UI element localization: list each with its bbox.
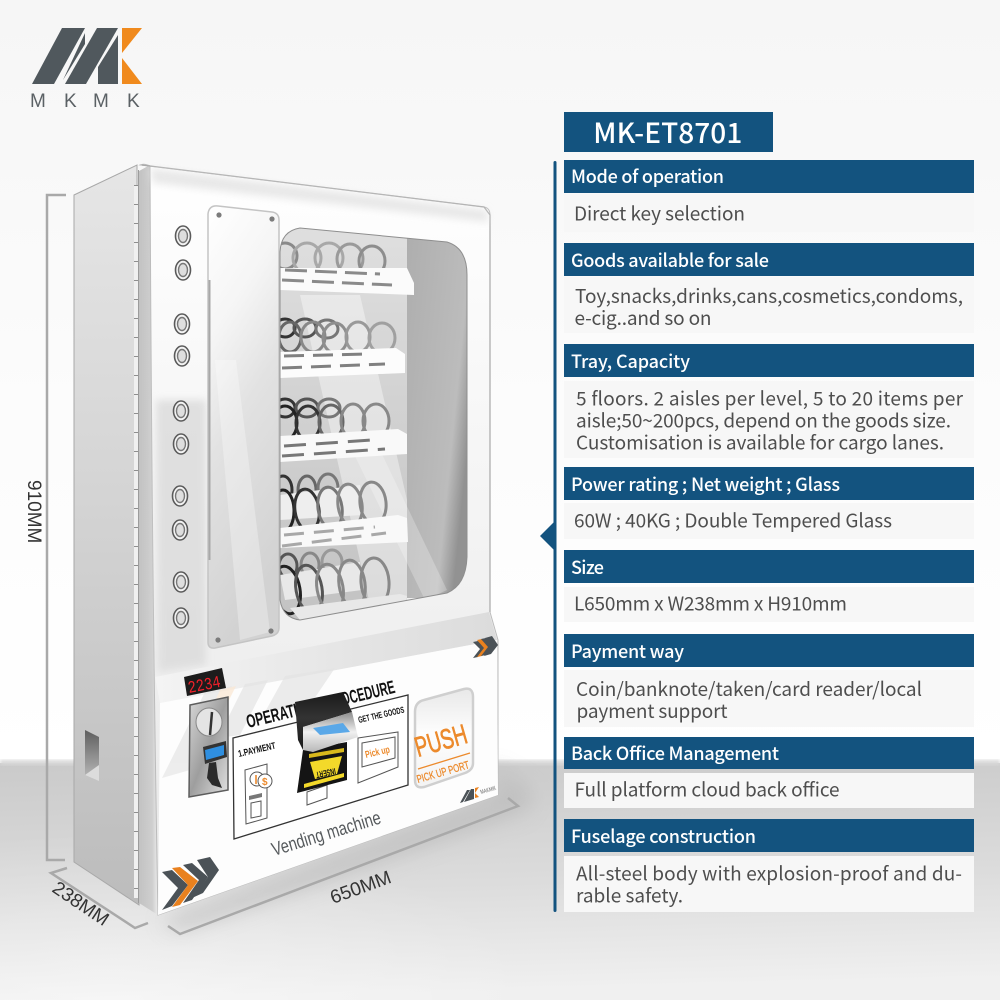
spec: power weight glass <box>564 467 974 539</box>
spec panel timeline rail <box>540 161 556 912</box>
machine side panel <box>74 165 139 905</box>
window outline <box>280 228 467 620</box>
bill validator: INSERT <box>315 766 337 780</box>
machine front <box>140 164 498 915</box>
spec: fuselage construction: All-steel body with explosion-proof and du- <box>576 860 962 886</box>
spec: fuselage construction <box>564 819 974 912</box>
dimension: width 238MM <box>48 868 148 931</box>
keypad buttons <box>172 226 190 628</box>
step 1 coin slot icon: $ <box>262 777 268 788</box>
floor glow <box>0 790 540 1000</box>
brand logo <box>30 28 142 112</box>
brand logo: K <box>64 91 77 112</box>
push pick-up port: PICK UP PORT <box>416 759 471 786</box>
spec: fuselage construction: rable safety. <box>576 882 683 908</box>
large chevrons bottom left <box>162 857 219 910</box>
spec: back office <box>564 737 974 808</box>
model title: MK-ET8701 <box>593 112 742 152</box>
spec: fuselage construction: Fuselage construction <box>571 823 756 849</box>
glass window and trays <box>270 225 467 625</box>
board title start: OPERATION <box>244 695 317 732</box>
spec: payment way: payment support <box>576 697 728 724</box>
background wall <box>0 0 1000 765</box>
brand logo: M <box>30 91 46 112</box>
spec: tray capacity: aisle;50~200pcs, depend on the goods size. <box>576 406 951 434</box>
lower fascia bevel <box>155 612 497 703</box>
red LED counter: 2234 <box>187 674 223 699</box>
step 3 pick up icon <box>358 732 398 783</box>
mirror door plate <box>208 206 279 648</box>
push pick-up port <box>411 689 473 787</box>
spec: tray capacity <box>564 344 974 458</box>
spec: goods available: e-cig..and so on <box>574 304 712 331</box>
machine floor shadow <box>160 765 535 930</box>
dimension: width 238MM: 238MM <box>48 878 112 931</box>
tray 2 <box>275 319 405 378</box>
spec: goods available: Toy,snacks,drinks,cans,cosmetics,condoms, <box>575 282 963 309</box>
operation procedure board <box>233 676 408 839</box>
tray 4 <box>272 474 408 548</box>
spec: goods available: Goods available for sale <box>571 247 769 273</box>
spec: back office: Full platform cloud back office <box>574 776 840 802</box>
tray 3 <box>273 399 407 462</box>
small brand mark: MAKMIK <box>480 786 497 796</box>
tray 5 <box>270 550 407 620</box>
push pick-up port: PUSH <box>411 718 471 763</box>
front top bevel <box>150 168 488 222</box>
step 3 label: GET THE GOODS <box>357 705 405 725</box>
left column shading <box>156 400 206 672</box>
machine caption: Vending machine <box>269 808 384 861</box>
faint fascia chevrons <box>162 668 335 778</box>
dimension: height 910MM: 910MM <box>23 480 44 543</box>
vending machine <box>74 164 498 915</box>
spec: mode of operation <box>564 160 974 232</box>
spec: size: L650mm x W238mm x H910mm <box>574 590 847 616</box>
spec: tray capacity: Tray, Capacity <box>571 348 690 374</box>
front top edge <box>142 165 490 612</box>
dimension: length 650MM: 650MM <box>328 867 394 909</box>
light rays <box>300 295 407 605</box>
spec: goods available <box>564 243 974 333</box>
spec: payment way: Coin/banknote/taken/card reader/local <box>576 675 922 702</box>
spec: tray capacity: Customisation is available for cargo lanes. <box>576 428 944 456</box>
spec: mode of operation: Direct key selection <box>574 200 745 226</box>
dimension: height 910MM <box>23 195 66 860</box>
dimension: length 650MM <box>168 798 518 934</box>
small brand mark <box>460 786 497 803</box>
coin acceptor <box>189 697 228 797</box>
spec: payment way <box>564 634 974 727</box>
spec: mode of operation: Mode of operation <box>571 163 724 189</box>
step 2 hand icon <box>307 785 327 805</box>
door edge strip <box>139 165 158 915</box>
tray 1 <box>273 243 414 295</box>
board title end: PROCEDURE <box>324 676 397 713</box>
step 1 label: 1.PAYMENT <box>237 741 277 760</box>
spec: power weight glass: Power rating ; Net weight ; Glass <box>571 471 840 497</box>
brand logo: M <box>93 91 109 112</box>
spec: power weight glass: 60W ; 40KG ; Double Tempered Glass <box>574 506 892 534</box>
coin box slot <box>85 730 99 781</box>
spec: tray capacity: 5 floors. 2 aisles per level, 5 to 20 items per <box>576 384 964 412</box>
brand logo: K <box>127 91 140 112</box>
spec: back office: Back Office Management <box>571 740 779 766</box>
bill validator <box>295 692 358 793</box>
spec: payment way: Payment way <box>571 638 684 664</box>
soft horizon <box>0 760 1000 765</box>
spec: size: Size <box>571 554 604 580</box>
step 1 coin slot icon <box>245 764 272 824</box>
spec: size <box>564 550 974 622</box>
small chevrons top right of fascia <box>473 636 498 658</box>
lower fascia <box>158 640 498 915</box>
step 3 pick up icon: Pick up <box>364 745 391 761</box>
door hinge <box>136 170 138 903</box>
background floor <box>0 763 1000 1000</box>
